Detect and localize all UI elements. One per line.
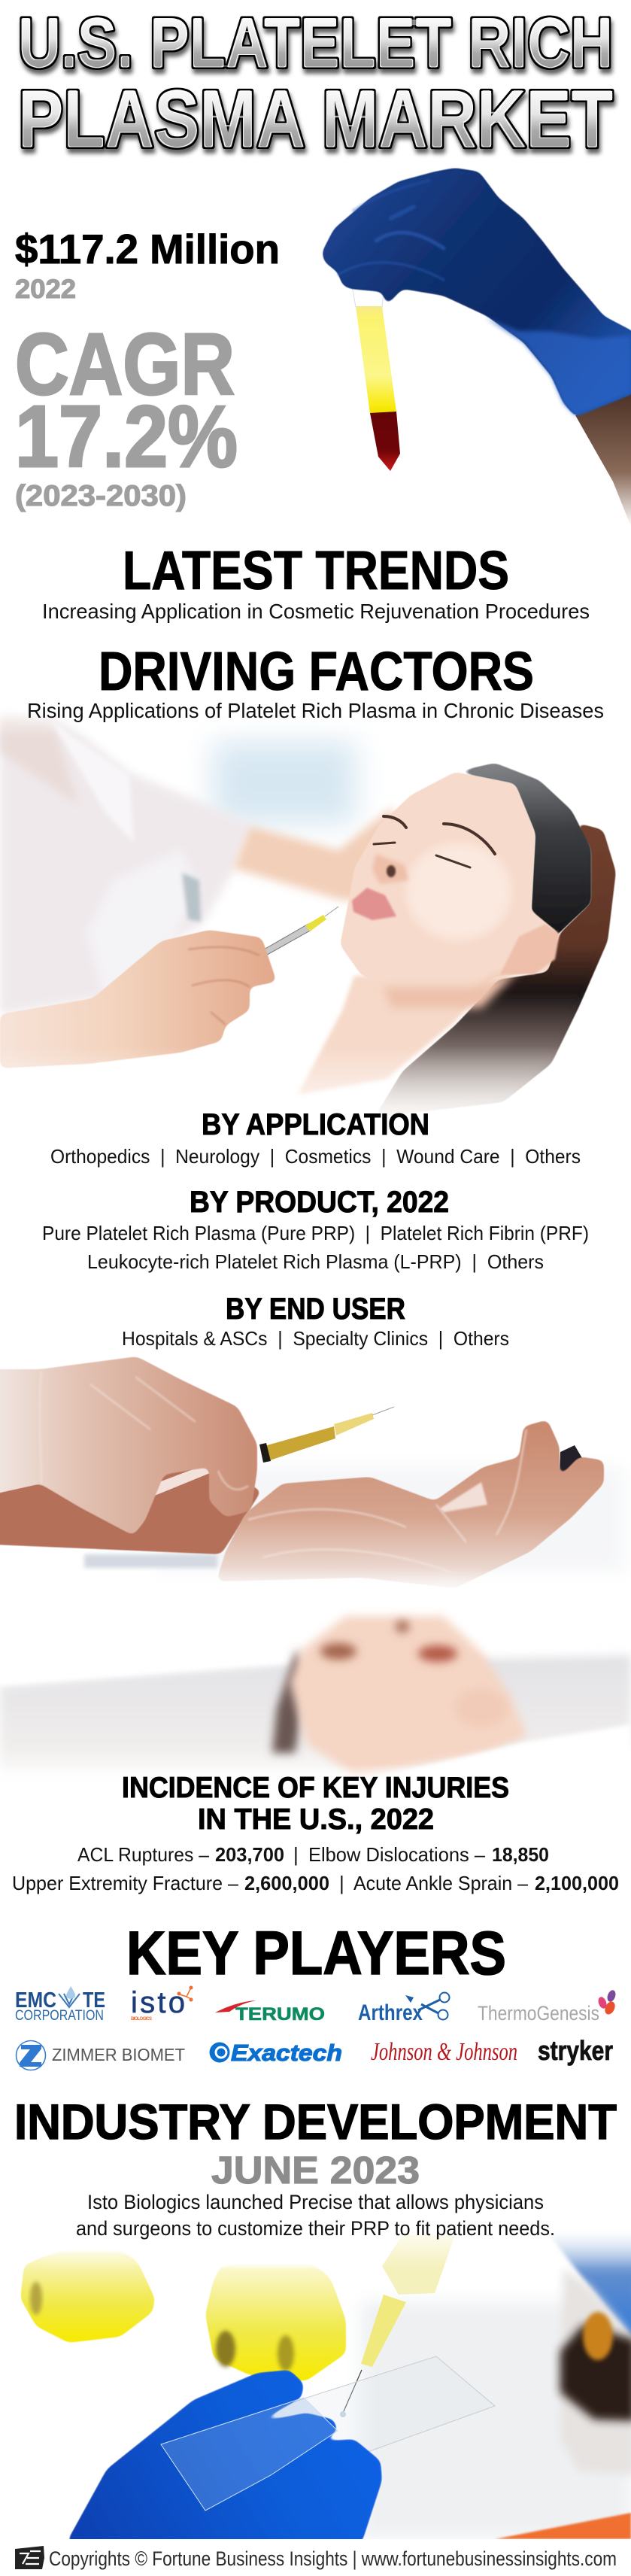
logo: Emcyte: CORPORATION bbox=[15, 2008, 104, 2024]
middle yellow drop bbox=[205, 2246, 346, 2381]
left drop dark spot bbox=[30, 2282, 42, 2315]
coat body shade bbox=[86, 850, 199, 1001]
blue glove bbox=[66, 2370, 382, 2543]
logo: ThermoGenesis: ThermoGenesis bbox=[478, 2002, 599, 2025]
logo: Exactech: Exactech bbox=[231, 2040, 342, 2066]
driving factors heading: DRIVING FACTORS bbox=[99, 642, 534, 702]
hair bbox=[455, 763, 591, 949]
left glove bbox=[0, 1356, 257, 1536]
white sheet bbox=[293, 1724, 631, 1806]
logo: Emcyte: EMC bbox=[15, 1988, 56, 2012]
CAGR value: 17.2% bbox=[15, 387, 238, 485]
by application heading: BY APPLICATION bbox=[202, 1108, 429, 1141]
orange tube bbox=[495, 2513, 631, 2539]
arm bbox=[575, 390, 631, 527]
injury figures: Acute Ankle Sprain – bbox=[353, 1872, 529, 1894]
logo: Stryker: stryker bbox=[538, 2035, 613, 2066]
logo: Terumo bbox=[215, 2000, 325, 2025]
white bottom fade bbox=[0, 1046, 631, 1132]
development text: Isto Biologics launched Precise that allows physicians bbox=[87, 2191, 544, 2213]
logo: Isto: BIOLOGICS bbox=[131, 2017, 152, 2022]
injury figures: 2,600,000 bbox=[244, 1872, 329, 1894]
syringe barrel bbox=[382, 2235, 455, 2295]
by product list line 1: Pure Platelet Rich Plasma (Pure PRP) | Platelet Rich Fibrin (PRF) bbox=[42, 1222, 589, 1244]
left yellow drop bbox=[20, 2235, 155, 2343]
injury figures: | bbox=[339, 1872, 344, 1894]
blurred hair bbox=[272, 1649, 308, 1753]
coat lapel bbox=[53, 722, 134, 843]
injury figures: 203,700 bbox=[215, 1843, 284, 1866]
doctor coat bbox=[0, 715, 250, 1014]
logo: Arthrex: Arthrex bbox=[358, 2000, 423, 2025]
lips bbox=[352, 888, 396, 920]
CAGR label: CAGR bbox=[15, 315, 235, 413]
logo: Zimmer Biomet: ZIMMER BIOMET bbox=[52, 2045, 185, 2064]
plunger bbox=[135, 1463, 214, 1502]
latest trends heading: LATEST TRENDS bbox=[123, 541, 509, 601]
by end user heading: BY END USER bbox=[226, 1293, 405, 1326]
injury figures bbox=[12, 1843, 619, 1894]
logo: ThermoGenesis bbox=[478, 1989, 617, 2025]
development text bbox=[76, 2191, 555, 2240]
gold syringe barrel bbox=[262, 1426, 335, 1462]
by end user list: Hospitals & ASCs | Specialty Clinics | Others bbox=[122, 1327, 509, 1350]
needle bbox=[372, 1407, 394, 1415]
slide over glove bbox=[161, 2398, 338, 2511]
market size year: 2022 bbox=[15, 275, 76, 304]
key players heading: KEY PLAYERS bbox=[126, 1919, 506, 1988]
palm highlight bbox=[440, 1482, 487, 1512]
development text: and surgeons to customize their PRP to fit patient needs. bbox=[76, 2217, 555, 2240]
logo: Johnson & Johnson: Johnson & Johnson bbox=[371, 2038, 517, 2066]
photo: syringe dropping plasma on glass slide bbox=[0, 2223, 631, 2576]
injuries heading bbox=[122, 1772, 509, 1836]
latest trends text: Increasing Application in Cosmetic Rejuvenation Procedures bbox=[42, 600, 590, 623]
logo: Isto: isto bbox=[131, 1986, 185, 2019]
right glove creases bbox=[248, 1429, 526, 1572]
development date: JUNE 2023 bbox=[211, 2149, 420, 2192]
coat skin tint bbox=[0, 715, 79, 805]
red blood layer bbox=[370, 412, 400, 471]
needle bbox=[344, 2370, 362, 2411]
white top fade bbox=[0, 700, 631, 737]
arm bbox=[0, 1460, 262, 1554]
injury figures: Upper Extremity Fracture – bbox=[12, 1872, 239, 1894]
white bottom fade bbox=[0, 1569, 631, 1599]
jaw shadow bbox=[384, 971, 519, 1008]
forecast period: (2023-2030) bbox=[15, 480, 187, 512]
blurred features bbox=[320, 1621, 508, 1727]
eyebrows and eyes bbox=[374, 816, 495, 867]
blurred face bbox=[290, 1616, 527, 1776]
injury figures: | bbox=[293, 1843, 299, 1866]
syringe hub bbox=[361, 2295, 406, 2367]
white strip below photo bbox=[0, 2539, 631, 2576]
ear bbox=[500, 924, 560, 974]
injury figures: 18,850 bbox=[492, 1843, 549, 1866]
footer logo icon bbox=[15, 2546, 44, 2569]
glove cuff highlight bbox=[485, 317, 631, 415]
glass slide back part bbox=[161, 2356, 495, 2511]
photo: gloved hand holding test tube bbox=[322, 168, 631, 527]
finger shadows bbox=[188, 947, 259, 1025]
syringe bbox=[259, 907, 338, 957]
grey-blue stripe bbox=[182, 873, 201, 922]
pale background band bbox=[158, 1467, 624, 1572]
right glove bbox=[217, 1420, 604, 1588]
dark jar contents bbox=[560, 2325, 631, 2421]
grey-blue patch bbox=[84, 1554, 217, 1568]
injury figures: ACL Ruptures – bbox=[77, 1843, 210, 1866]
doctor hand bbox=[0, 930, 277, 1068]
doctor rear forearm bbox=[233, 807, 394, 903]
cheek tint bbox=[406, 843, 511, 940]
injury figures: Elbow Dislocations – bbox=[308, 1843, 486, 1866]
glass jar bbox=[560, 2268, 631, 2475]
glove folds bbox=[338, 181, 444, 280]
market size value: $117.2 Million bbox=[15, 226, 280, 272]
logo: Emcyte bbox=[15, 1986, 105, 2024]
yellow plasma bbox=[356, 306, 396, 414]
syringe hub bbox=[334, 1413, 374, 1435]
by product heading: BY PRODUCT, 2022 bbox=[190, 1186, 449, 1219]
syringe black stopper bbox=[259, 1443, 271, 1463]
injuries heading: IN THE U.S., 2022 bbox=[198, 1803, 434, 1836]
photo: cosmetic injection on patient bbox=[0, 700, 631, 1132]
logo: Zimmer Biomet bbox=[17, 2040, 185, 2070]
face bbox=[340, 772, 560, 987]
nose bbox=[372, 854, 408, 884]
title bbox=[18, 3, 613, 164]
left glove creases bbox=[40, 1371, 248, 1490]
driving factors text: Rising Applications of Platelet Rich Plasma in Chronic Diseases bbox=[27, 699, 604, 722]
purple vial bbox=[560, 1445, 582, 1475]
top fade bbox=[0, 2223, 631, 2268]
blue glove bbox=[322, 168, 631, 417]
injuries heading: INCIDENCE OF KEY INJURIES bbox=[122, 1772, 509, 1804]
blue background blur bbox=[213, 741, 356, 824]
grey wedge background bbox=[0, 1655, 631, 1783]
injury figures: 2,100,000 bbox=[535, 1872, 619, 1894]
ponytail bbox=[375, 822, 616, 1117]
logo: Arthrex bbox=[358, 1992, 450, 2025]
by application list: Orthopedics | Neurology | Cosmetics | Wound Care | Others bbox=[50, 1145, 581, 1168]
bottom fade bbox=[0, 1764, 631, 1787]
middle drop dark spots bbox=[216, 2331, 294, 2371]
photo: gloved hands with syringe and patient bbox=[0, 1356, 631, 1806]
logo: Terumo: TERUMO bbox=[235, 2004, 325, 2025]
nostril bbox=[387, 865, 396, 877]
logo: Emcyte: TE bbox=[83, 1988, 105, 2012]
neck bbox=[298, 976, 495, 1095]
by product list line 2: Leukocyte-rich Platelet Rich Plasma (L-PRP) | Others bbox=[87, 1250, 544, 1273]
right blue object bbox=[548, 2232, 631, 2342]
droplet bbox=[340, 2411, 346, 2417]
light grey table shade bbox=[361, 2302, 631, 2539]
white band bbox=[0, 1633, 290, 1685]
amber contents bbox=[583, 2312, 613, 2360]
glass tube cap bbox=[352, 286, 384, 307]
